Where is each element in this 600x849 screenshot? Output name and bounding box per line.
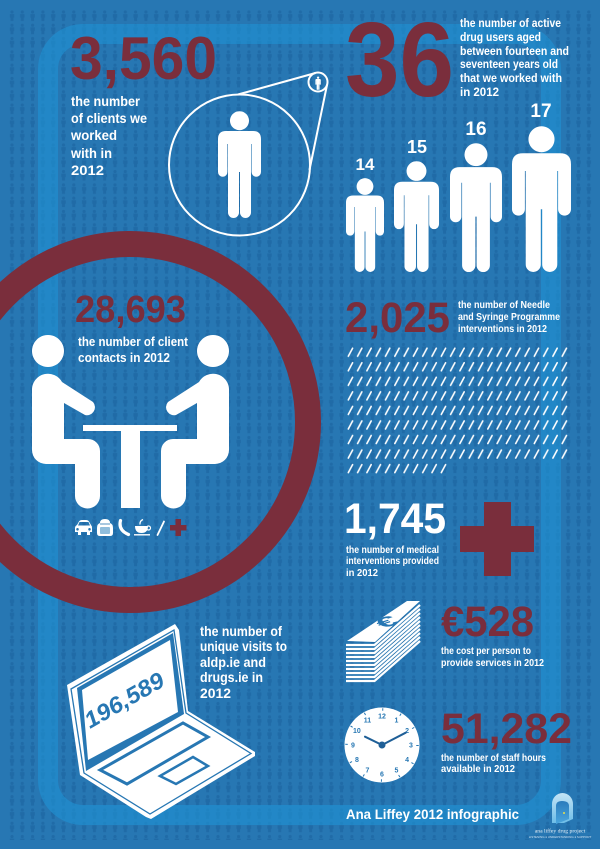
needle description (458, 299, 560, 335)
icon: clock: 3 (409, 742, 413, 750)
panel: client contacts (0, 244, 308, 600)
website description: drugs.ie in (200, 670, 263, 685)
clients description: the number (71, 94, 141, 109)
person aged 16: 16 (465, 119, 487, 140)
number 51,282: 51,282 (441, 705, 572, 753)
icon: stack of euro notes: € (370, 612, 403, 631)
panel: young drug users (345, 1, 571, 272)
website description: aldp.ie and (200, 655, 266, 670)
icon: medical cross (170, 519, 186, 536)
icon: clock (344, 708, 420, 782)
cost description (441, 645, 544, 669)
logo: ana liffey drug project: ana liffey drug project (535, 828, 586, 834)
number 36: 36 (345, 1, 454, 119)
staff hours description (441, 752, 546, 775)
person aged 17: 17 (530, 101, 552, 122)
panel: cost per person (346, 598, 544, 681)
clients description: 2012 (71, 163, 104, 178)
icon: clock: 8 (355, 757, 359, 764)
clients description (70, 94, 147, 178)
person aged 14 (346, 155, 384, 272)
person aged 17 (512, 101, 571, 272)
contacts description: contacts in 2012 (78, 351, 170, 365)
large maroon ring (0, 244, 308, 600)
needle description: and Syringe Programme (458, 311, 560, 323)
person aged 15 (394, 137, 439, 272)
young users description: drug users aged (460, 32, 541, 44)
needle description: the number of Needle (458, 299, 550, 311)
icon: telephone (120, 520, 128, 534)
icon: clock: 7 (366, 768, 370, 775)
young users description: the number of active (460, 18, 561, 30)
needle description: interventions in 2012 (458, 323, 547, 335)
contacts description (78, 335, 189, 365)
rows of syringe marks (347, 347, 570, 475)
icon: clock: 9 (351, 742, 355, 750)
logo: ana liffey drug project (529, 793, 591, 839)
number 1,745: 1,745 (344, 495, 446, 543)
young users description: that we worked with (460, 73, 562, 85)
website description: unique visits to (200, 639, 287, 654)
staff hours description: the number of staff hours (441, 752, 546, 764)
number 3,560: 3,560 (70, 25, 217, 92)
cost description: the cost per person to (441, 645, 531, 657)
young users description: seventeen years old (460, 59, 558, 71)
icon: backpack (97, 519, 113, 536)
young users description: in 2012 (460, 87, 499, 99)
icon: clock: 11 (364, 717, 371, 724)
panel: staff hours (344, 705, 572, 782)
clients description: of clients we (71, 111, 147, 126)
website description (200, 624, 287, 701)
light blue border band (48, 34, 551, 815)
number 2,025: 2,025 (345, 294, 450, 342)
icon: car (75, 520, 92, 535)
young users description: between fourteen and (460, 46, 569, 58)
logo: ana liffey drug project: LISTENING ♦ UNDERSTANDING ♦ SUPPORT (529, 835, 591, 839)
panel: medical interventions (344, 495, 534, 579)
icon: two people at a table (32, 335, 229, 508)
icon: stack of euro notes (346, 601, 420, 681)
website description: 2012 (200, 686, 231, 701)
icon: clock: 6 (380, 772, 384, 778)
young users description (460, 18, 569, 99)
clients description: with in (70, 146, 112, 161)
person aged 16 (450, 119, 502, 272)
panel: website visits (67, 624, 287, 819)
magnifier circle with person (169, 72, 328, 236)
staff hours description: available in 2012 (441, 763, 515, 775)
person aged 15: 15 (407, 137, 427, 157)
medical description: interventions provided (346, 555, 439, 567)
contacts description: the number of client (78, 335, 189, 349)
number 28,693: 28,693 (75, 289, 186, 331)
medical description: the number of medical (346, 544, 439, 556)
icon: clock: 4 (405, 757, 409, 764)
icon: large red cross (460, 502, 534, 576)
cost description: provide services in 2012 (441, 657, 544, 669)
panel: needle and syringe programme (345, 294, 570, 475)
clients description: worked (70, 128, 117, 143)
icon: syringe (158, 522, 164, 535)
medical description (346, 544, 439, 579)
laptop screen number: 196,589 (80, 667, 169, 733)
icon: clock: 12 (378, 714, 386, 720)
icon: laptop (67, 624, 255, 819)
website description: the number of (200, 624, 282, 639)
person aged 14: 14 (356, 155, 375, 174)
icon row: services (75, 519, 186, 536)
icon: clock: 1 (395, 717, 399, 724)
footer title: Ana Liffey 2012 infographic (346, 807, 519, 822)
icon: clock: 10 (353, 728, 361, 735)
icon: coffee cup (134, 520, 150, 535)
icon: clock: 5 (395, 768, 399, 775)
number €528: €528 (441, 598, 534, 646)
medical description: in 2012 (346, 567, 378, 579)
icon: clock: 2 (405, 728, 409, 735)
panel: clients (70, 25, 328, 236)
